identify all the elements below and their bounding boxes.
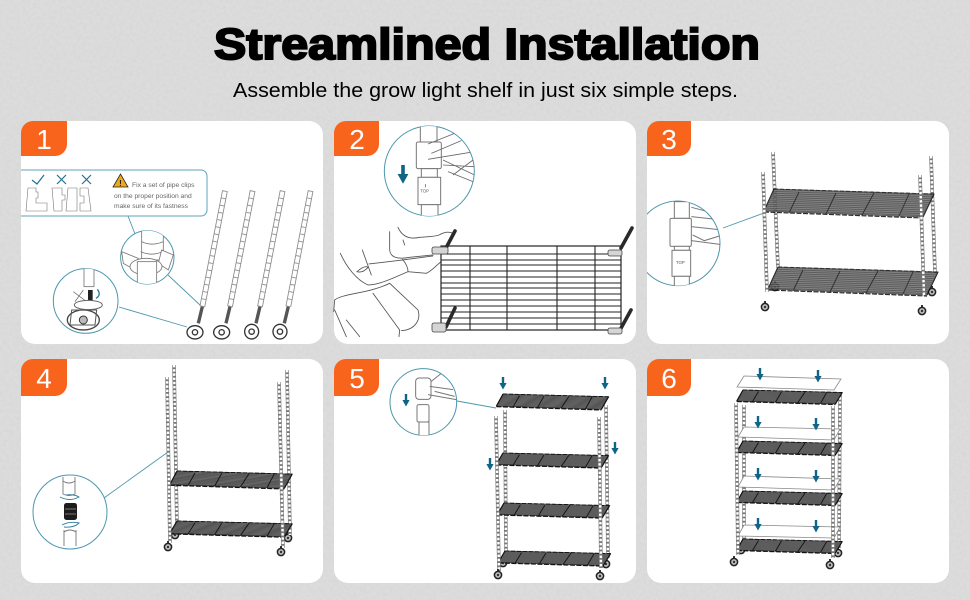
badge: step 4 (21, 359, 67, 396)
callout text: make sure of its fastness (114, 203, 189, 210)
shelf assembly (164, 365, 292, 556)
illustration: person assembling (334, 227, 453, 337)
subtitle: Assemble the grow light shelf in just six simple steps. (233, 79, 738, 102)
badge: step 3 (647, 121, 691, 156)
panel: step 2 (334, 121, 636, 344)
icon: warning triangle (113, 174, 128, 188)
leader line (104, 452, 168, 498)
badge: step 5 (334, 359, 379, 396)
wire shelf grid (441, 246, 621, 330)
title: Streamlined Installation (214, 21, 760, 69)
shelf assembly (494, 394, 611, 580)
badge: step 1: 1 (36, 124, 52, 155)
icon: cross marks (57, 175, 91, 184)
corner clips and poles (432, 228, 632, 334)
circle detail: pipe clip (121, 230, 174, 285)
circle detail: sleeve onto clip (384, 125, 475, 218)
arrow: left side (486, 458, 494, 470)
panel: step 3 (635, 121, 949, 344)
callout: pipe clip instructions (21, 170, 207, 216)
panel: step 1 (21, 121, 323, 344)
badge: step 2 (334, 121, 379, 156)
shelf assembly (761, 152, 938, 315)
poles with casters (187, 191, 311, 339)
callout text: on the proper position and (114, 193, 192, 200)
arrow: down (398, 165, 408, 184)
circle detail: sleeve on top shelf (390, 369, 457, 437)
icon: warning triangle: ! (119, 179, 122, 188)
icon: check mark (32, 175, 44, 184)
shelf assembly with liners (730, 376, 842, 569)
arrow: inset (402, 394, 410, 406)
shelf liners (737, 376, 841, 538)
panel: step 4 (21, 359, 323, 583)
badge: step 6 (647, 359, 691, 396)
badge: step 2: 2 (349, 124, 365, 155)
callout text (114, 182, 195, 210)
badge: step 6: 6 (661, 363, 677, 394)
circle detail: sleeve onto clip: TOP (420, 188, 429, 193)
badge: step 1 (21, 121, 67, 156)
diagram: clip orientations (26, 188, 91, 211)
circle detail: sleeve (647, 200, 720, 286)
callout text: Fix a set of pipe clips (132, 182, 195, 189)
circle detail: connector (33, 475, 107, 549)
circle detail: sleeve: TOP (676, 260, 685, 265)
badge: step 4: 4 (36, 363, 52, 394)
arrow: top left (499, 377, 507, 390)
badge: step 3: 3 (661, 124, 677, 155)
panel: step 5 (334, 359, 636, 583)
panel: step 6 (647, 359, 949, 583)
badge: step 5: 5 (349, 363, 365, 394)
leader lines (119, 216, 200, 327)
leader line (457, 401, 496, 408)
arrows: liners going down (754, 368, 822, 532)
leader line (723, 213, 764, 228)
arrow: right side (611, 442, 619, 454)
circle detail: caster bolt (53, 268, 118, 333)
arrow: top right (601, 377, 609, 390)
